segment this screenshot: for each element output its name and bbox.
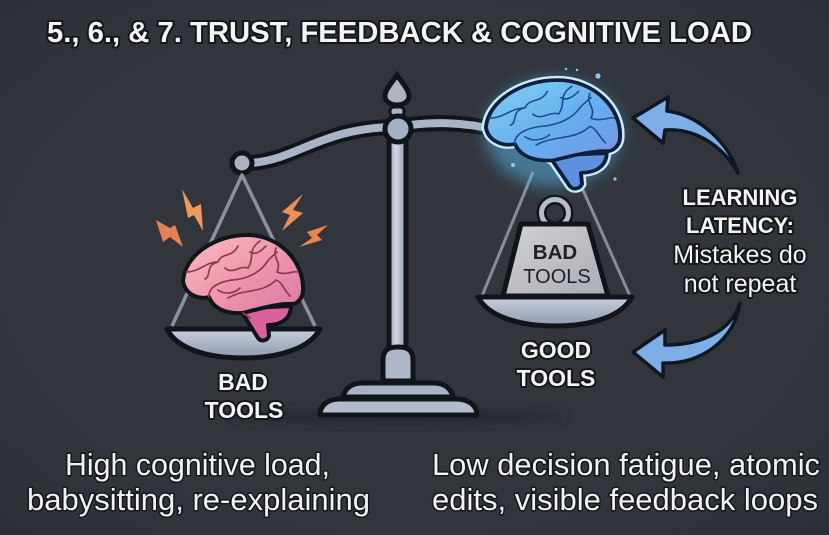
lightning bolt — [282, 194, 303, 231]
sparkles — [511, 68, 617, 181]
callout: learning latency: not repeat — [684, 270, 796, 298]
callout: learning latency: LATENCY: — [686, 213, 794, 238]
left label: bad tools: TOOLS — [205, 397, 283, 423]
arrow: top curved feedback arrow — [633, 97, 738, 173]
base shadow — [228, 411, 568, 423]
base upper tier — [343, 383, 453, 397]
lightning bolt — [156, 220, 183, 247]
caption: bad tools effects — [27, 447, 370, 517]
lightning bolt — [299, 225, 328, 247]
right label: good tools: GOOD — [521, 337, 591, 363]
brain glow — [485, 79, 621, 187]
callout: learning latency — [673, 185, 807, 298]
arrow: bottom curved feedback arrow — [633, 303, 740, 377]
right strings — [482, 172, 630, 296]
callout: learning latency: LEARNING — [683, 185, 797, 210]
base lower tier — [320, 399, 477, 415]
left pan — [167, 329, 320, 358]
finial neck — [390, 107, 404, 116]
callout: learning latency: Mistakes do — [673, 241, 807, 269]
post collar — [383, 347, 413, 381]
weight body — [503, 224, 608, 296]
left pivot — [232, 153, 252, 173]
post — [389, 130, 406, 355]
left label: bad tools: BAD — [218, 369, 268, 395]
beam — [242, 123, 495, 163]
right pan — [478, 297, 632, 326]
balance scale stand — [228, 75, 568, 423]
right scale pan with weight — [478, 172, 632, 326]
caption: good tools effects — [432, 447, 820, 517]
caption: bad tools effects: High cognitive load, — [65, 447, 330, 482]
lightning bolt — [182, 189, 203, 231]
right label: good tools — [517, 337, 595, 391]
left label: bad tools — [205, 369, 283, 423]
weight label: BAD — [533, 241, 577, 264]
blue brain shape — [486, 80, 620, 189]
title: 5., 6., & 7. TRUST, FEEDBACK & COGNITIVE LOAD — [47, 17, 752, 49]
pink brain — [183, 235, 303, 340]
left strings — [172, 175, 315, 326]
right label: good tools: TOOLS — [517, 365, 595, 391]
left scale pan with stressed brain — [156, 175, 328, 358]
caption: good tools effects: Low decision fatigue, atomic — [432, 447, 820, 482]
caption: good tools effects: edits, visible feedback loops — [432, 482, 818, 517]
weight label: TOOLS — [523, 266, 591, 288]
weight ring — [542, 200, 568, 226]
glowing blue brain — [485, 68, 621, 189]
caption: bad tools effects: babysitting, re-explaining — [27, 482, 370, 517]
weight label — [523, 241, 591, 288]
finial — [385, 75, 409, 105]
hub — [385, 116, 411, 142]
